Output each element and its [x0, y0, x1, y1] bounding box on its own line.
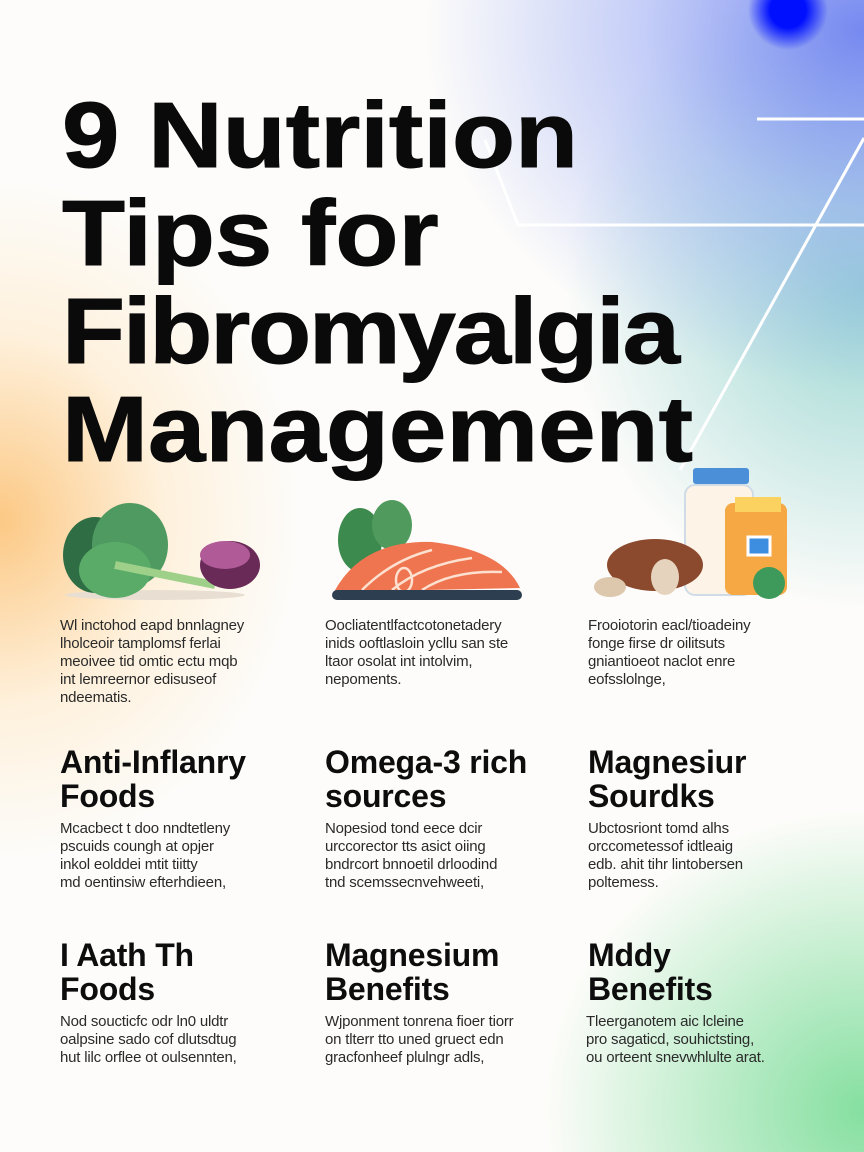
heading: Math Foods: Foods	[60, 971, 155, 1007]
heading: Magnesiur	[588, 744, 746, 814]
text block: row 2 col 2: urccorector tts asict oiing	[325, 838, 486, 855]
text block: row 2 col 3	[588, 820, 743, 891]
heading: Magnesium Benefits: Magnesium	[325, 937, 499, 973]
text block: column 3 top	[588, 617, 751, 688]
heading: Magnesiur: Magnesiur	[588, 744, 746, 780]
text block: column 2 top: inids ooftlasloin ycllu san ste	[325, 635, 508, 652]
text block: row 2 col 1: pscuids coungh at opjer	[60, 838, 214, 855]
heading: Omega-3	[325, 744, 527, 814]
text block: row 3 col 2: on tlterr tto uned gruect edn	[325, 1031, 504, 1048]
title	[62, 83, 693, 481]
text block: row 2 col 1	[60, 820, 230, 891]
text block: column 1 top: Wl inctohod eapd bnnlagney	[60, 617, 244, 634]
text block: row 2 col 2	[325, 820, 497, 891]
text block: row 3 col 2	[325, 1013, 514, 1066]
heading: Mddy Benefits: Mddy	[588, 937, 671, 973]
text block: row 2 col 1: inkol eolddei mtit tiitty	[60, 856, 198, 873]
text block: column 1 top: meoivee tid omtic ectu mqb	[60, 653, 237, 670]
title: 9 Nutrition	[62, 83, 578, 187]
icon: leafy greens	[63, 503, 260, 600]
text block: column 1 top: ndeematis.	[60, 689, 131, 706]
heading: Math Foods	[60, 937, 194, 1007]
text block: row 2 col 3: poltemess.	[588, 874, 659, 891]
text block: column 3 top: gniantioeot naclot enre	[588, 653, 735, 670]
text block: row 3 col 1: oalpsine sado cof dlutsdtug	[60, 1031, 236, 1048]
text block: row 3 col 3: pro sagaticd, souhictsting,	[586, 1031, 754, 1048]
text block: row 3 col 2: gracfonheef plulngr adls,	[325, 1049, 484, 1066]
text block: row 3 col 2: Wjponment tonrena fioer tiorr	[325, 1013, 513, 1030]
text block: row 2 col 2: bndrcort bnnoetil drloodind	[325, 856, 497, 873]
text block: column 1 top: int lemreernor edisuseof	[60, 671, 216, 688]
title: Management	[62, 377, 693, 481]
text block: row 3 col 1: Nod soucticfc odr ln0 uldtr	[60, 1013, 228, 1030]
icon: supplements and nuts	[594, 468, 787, 599]
text block: row 2 col 3: Ubctosriont tomd alhs	[588, 820, 729, 837]
heading: Anti-Inflanry Foods: Foods	[60, 778, 155, 814]
heading: Math Foods: I Aath Th	[60, 937, 194, 973]
text block: column 1 top	[60, 617, 244, 706]
heading: Omega-3: sources	[325, 778, 446, 814]
icon: salmon	[332, 500, 522, 600]
heading: Omega-3: Omega-3 rich	[325, 744, 527, 780]
text block: row 2 col 2: Nopesiod tond eece dcir	[325, 820, 482, 837]
text block: row 2 col 1: Mcacbect t doo nndtetleny	[60, 820, 230, 837]
text block: column 2 top: Oocliatentlfactcotonetadery	[325, 617, 501, 634]
text block: row 2 col 1: md oentinsiw efterhdieen,	[60, 874, 226, 891]
text block: row 2 col 3: orccometessof idtleaig	[588, 838, 733, 855]
text block: row 3 col 1	[60, 1013, 237, 1066]
text block: row 3 col 3	[586, 1013, 765, 1066]
text block: row 2 col 3: edb. ahit tihr lintobersen	[588, 856, 743, 873]
text block: column 2 top: nepoments.	[325, 671, 401, 688]
text block: column 2 top	[325, 617, 508, 688]
text block: row 3 col 3: Tleerganotem aic lcleine	[586, 1013, 744, 1030]
heading: Anti-Inflanry Foods	[60, 744, 246, 814]
text block: column 3 top: fonge firse dr oilitsuts	[588, 635, 725, 652]
heading: Magnesiur: Sourdks	[588, 778, 715, 814]
text block: row 3 col 1: hut lilc orflee ot oulsennten,	[60, 1049, 237, 1066]
title: Fibromyalgia	[62, 279, 678, 383]
heading: Magnesium Benefits	[325, 937, 499, 1007]
text block: column 3 top: eofsslolnge,	[588, 671, 666, 688]
text block: column 2 top: ltaor osolat int intolvim,	[325, 653, 472, 670]
title: Tips for	[62, 181, 439, 285]
text block: row 3 col 3: ou orteent snevwhlulte arat.	[586, 1049, 765, 1066]
heading: Mddy Benefits	[588, 937, 713, 1007]
heading: Anti-Inflanry Foods: Anti-Inflanry	[60, 744, 246, 780]
heading: Mddy Benefits: Benefits	[588, 971, 713, 1007]
text block: column 3 top: Frooiotorin eacl/tioadeiny	[588, 617, 750, 634]
heading: Magnesium Benefits: Benefits	[325, 971, 450, 1007]
text block: column 1 top: lholceoir tamplomsf ferlai	[60, 635, 221, 652]
text block: row 2 col 2: tnd scemssecnvehweeti,	[325, 874, 484, 891]
